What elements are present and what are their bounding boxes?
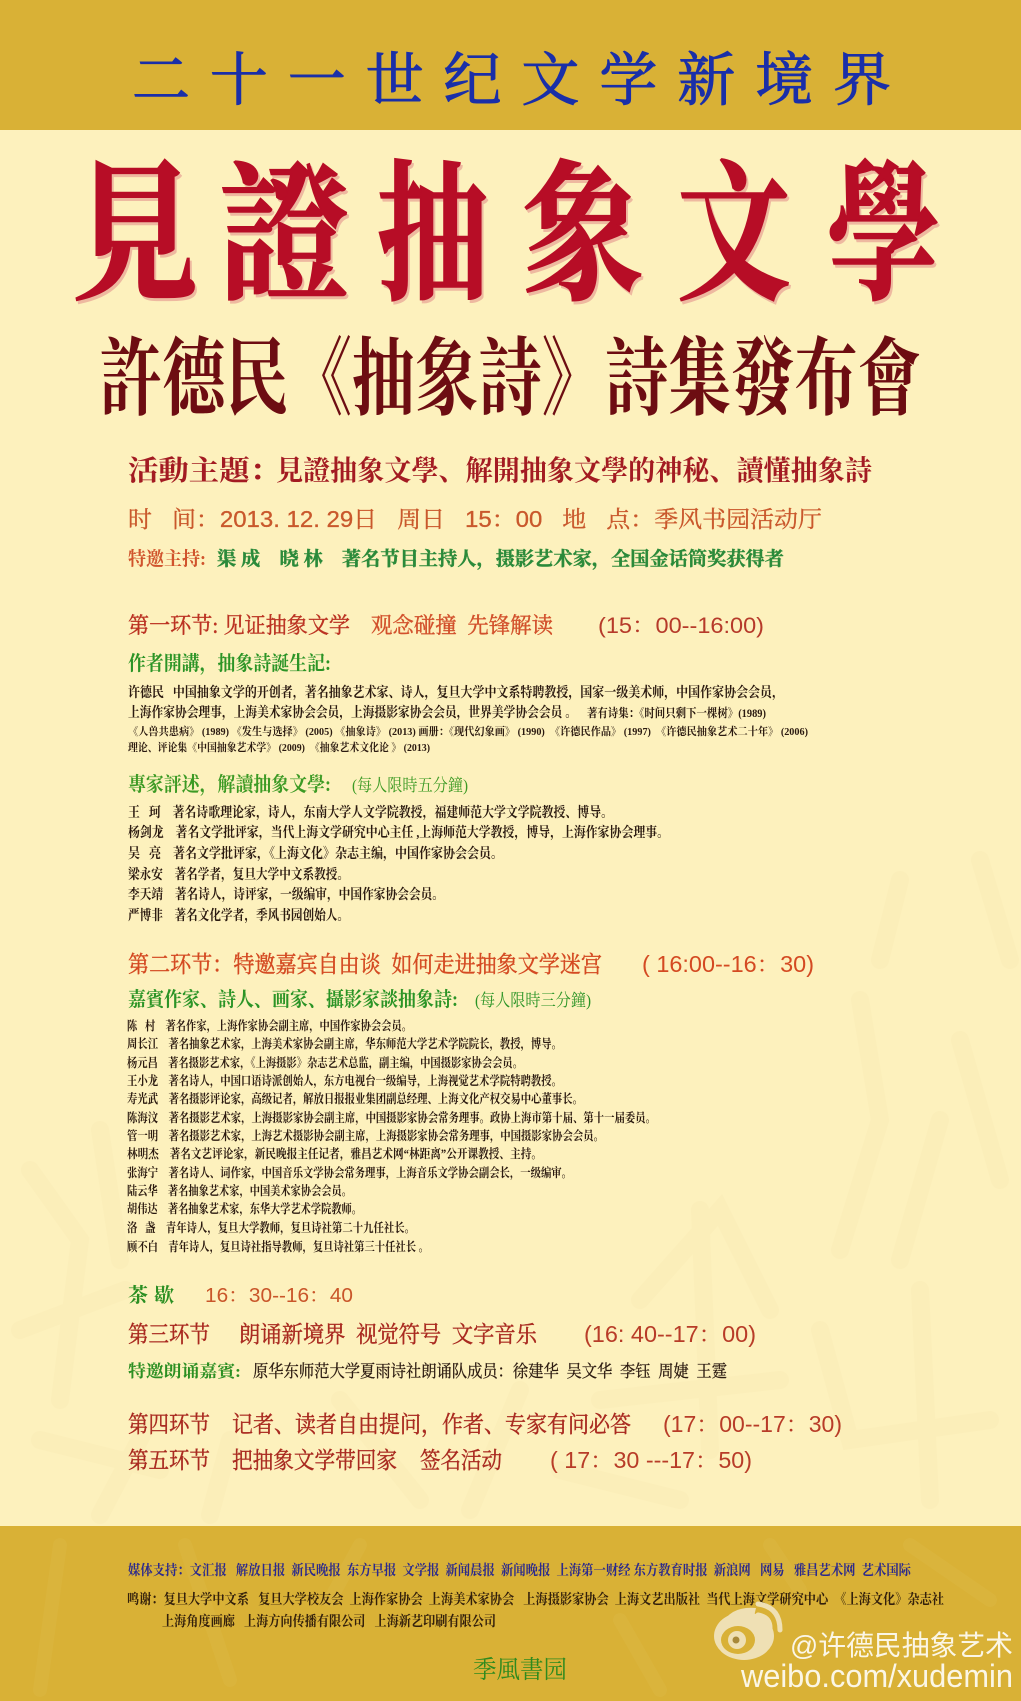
section 3 heading: 朗诵新境界 视觉符号 文字音乐 (239, 1322, 538, 1347)
section 3 heading (128, 1321, 756, 1347)
main title: 見證抽象文學: 文 (677, 152, 791, 320)
experts list: 吴 亮 著名文学批评家，《上海文化》杂志主编，中国作家协会会员。 (128, 845, 503, 862)
guests list: 寿光武 著名摄影评论家，高级记者，解放日报报业集团副总经理、上海文化产权交易中心董事长。 (127, 1091, 583, 1106)
main title: 見證抽象文學: 象 (522, 152, 644, 320)
main title: 見證抽象文學: 抽 (377, 152, 489, 320)
guests list: 陆云华 著名抽象艺术家，中国美术家协会会员。 (127, 1183, 352, 1198)
author biography: 著有诗集：《时间只剩下一棵树》(1989) (587, 705, 766, 720)
watermark: weibo handle: @许德民抽象艺术 (790, 1630, 1013, 1661)
author biography: 理论、评论集《中国抽象艺术学》 (2009) 《抽象艺术文化论 》 (2013) (128, 740, 430, 754)
guests list: 周长江 著名抽象艺术家，上海美术家协会副主席，华东师范大学艺术学院院长，教授，博导。 (127, 1036, 562, 1051)
section 5 heading: 签名活动 (420, 1448, 502, 1473)
main title: 見證抽象文學: 學 (828, 155, 942, 323)
guests list: 林明杰 著名文艺评论家，新民晚报主任记者，雅昌艺术网“林距离”公开课教授、主持。 (127, 1146, 542, 1161)
top band (0, 0, 1021, 130)
section 5 heading: ( 17：30 ---17：50) (550, 1447, 752, 1473)
section 5 heading: 第五环节 (128, 1448, 210, 1473)
main title: 見證抽象文學: 證 (219, 152, 350, 320)
guests list: 杨元昌 著名摄影艺术家，《上海摄影》杂志艺术总监，副主编，中国摄影家协会会员。 (127, 1055, 523, 1070)
section 1 heading: 观念碰撞 先锋解读 (371, 613, 553, 638)
time and place: 时 间：2013. 12. 29日 周日 15：00 地 点：季风书园活动厅 (128, 506, 822, 532)
section 1 heading: 第一环节: 见证抽象文学 (128, 613, 350, 638)
guests list: 管一明 著名摄影艺术家，上海艺术摄影协会副主席，上海摄影家协会常务理事，中国摄影家协会会员。 (127, 1128, 604, 1143)
section 1 heading (128, 613, 764, 638)
reciters line (128, 1361, 727, 1381)
section 2 heading: 第二环节：特邀嘉宾自由谈 如何走进抽象文学迷宫 (128, 952, 602, 977)
main title: 見證抽象文學: 象 (524, 155, 646, 323)
host line: 渠 成 晓 林 著名节目主持人，摄影艺术家，全国金话筒奖获得者 (217, 547, 784, 570)
experts list: 李天靖 著名诗人，诗评家，一级编审，中国作家协会会员。 (128, 886, 444, 903)
section 3 heading: (16: 40--17：00) (584, 1321, 756, 1347)
theme line: 見證抽象文學、解開抽象文學的神秘、讀懂抽象詩 (276, 455, 872, 487)
main title: 見證抽象文學: 文 (679, 155, 793, 323)
experts list (128, 804, 669, 924)
header: 二十一世纪文学新境界: 二十一世纪文学新境界 (132, 48, 891, 113)
guests list: 胡伟达 著名抽象艺术家，东华大学艺术学院教师。 (127, 1201, 362, 1216)
guests list: 张海宁 著名诗人、词作家，中国音乐文学协会常务理事，上海音乐文学协会副会长，一级编审。 (127, 1165, 572, 1180)
guests list (127, 1018, 656, 1254)
experts heading: 專家評述，解讀抽象文學: (128, 772, 331, 796)
main title: 見證抽象文學: 見 (72, 152, 198, 320)
main title: 見證抽象文學: 學 (826, 152, 940, 320)
guests heading: 嘉賓作家、詩人、画家、攝影家談抽象詩: (128, 987, 458, 1011)
media support: 媒体支持：文汇报 解放日报 新民晚报 东方早报 文学报 新闻晨报 新闻晚报 上海第一财经 东方教育时报 新浪网 网易 雅昌艺术网 艺术国际 (128, 1562, 912, 1579)
tea break: 16：30--16：40 (205, 1285, 353, 1307)
section 4 heading: (17：00--17：30) (663, 1411, 842, 1437)
section 5 heading: 把抽象文学带回家 (232, 1448, 397, 1473)
author talk heading: 作者開講，抽象詩誕生記: (128, 652, 331, 675)
tea break: 茶 歇 (128, 1283, 174, 1307)
experts list: 杨剑龙 著名文学批评家，当代上海文学研究中心主任 ,上海师范大学教授，博导，上海作家协会理事。 (128, 824, 669, 841)
experts list: 王 珂 著名诗歌理论家，诗人，东南大学人文学院教授，福建师范大学文学院教授、博导。 (128, 804, 613, 821)
main title: 見證抽象文學 (72, 152, 942, 323)
guests list: 陈海汶 著名摄影艺术家，上海摄影家协会副主席，中国摄影家协会常务理事。政协上海市第十届、第十一届委员。 (127, 1110, 656, 1125)
author biography: 上海作家协会理事，上海美术家协会会员，上海摄影家协会会员，世界美学协会会员 。 (128, 704, 577, 721)
experts heading: (每人限時五分鐘) (352, 776, 468, 795)
acknowledgements: 上海角度画廊 上海方向传播有限公司 上海新艺印刷有限公司 (162, 1613, 496, 1630)
host line: 特邀主持: (128, 548, 206, 570)
bottom band (0, 1526, 1021, 1701)
section 1 heading: (15：00--16:00) (598, 613, 764, 638)
section 4 heading (128, 1411, 842, 1438)
guests heading: (每人限時三分鐘) (475, 991, 591, 1010)
guests list: 王小龙 著名诗人，中国口语诗派创始人，东方电视台一级编导，上海视觉艺术学院特聘教授。 (127, 1073, 562, 1088)
section 5 heading (128, 1447, 752, 1473)
section 4 heading: 第四环节 (128, 1412, 210, 1437)
section 4 heading: 记者、读者自由提问，作者、专家有问必答 (232, 1412, 631, 1438)
theme line: 活動主題： (128, 455, 280, 487)
tea break (128, 1283, 353, 1307)
experts heading (128, 772, 468, 796)
section 3 heading: 第三环节 (128, 1322, 210, 1347)
guests list: 顾不白 青年诗人，复旦诗社指导教师，复旦诗社第三十任社长 。 (127, 1239, 429, 1254)
guests list: 洛 盏 青年诗人，复旦大学教师，复旦诗社第二十九任社长。 (127, 1220, 415, 1235)
section 2 heading: ( 16:00--16：30) (642, 951, 814, 977)
acknowledgements (127, 1591, 944, 1630)
organiser: 季風書园: 季風書园 (473, 1656, 567, 1684)
reciters line: 特邀朗诵嘉賓: (128, 1361, 241, 1381)
author biography: 许德民 中国抽象文学的开创者，著名抽象艺术家、诗人，复旦大学中文系特聘教授，国家一级美术师，中国作家协会会员， (128, 684, 784, 701)
experts list: 严博非 著名文化学者，季风书园创始人。 (128, 907, 349, 924)
experts list: 梁永安 著名学者，复旦大学中文系教授。 (128, 866, 349, 883)
icon: weibo logo (714, 1604, 780, 1660)
main title: 見證抽象文學: 證 (221, 155, 352, 323)
author biography: 《人兽共患病》 (1989) 《发生与选择》 (2005) 《抽象诗》 (2013) 画册：《现代幻象画》 (1990) 《许德民作品》 (1997) 《许德民抽象艺术二十年》 (2006) (128, 724, 808, 738)
watermark: weibo url: weibo.com/xudemin (740, 1658, 1013, 1694)
main title: 見證抽象文學: 見 (74, 155, 200, 323)
reciters line: 原华东师范大学夏雨诗社朗诵队成员：徐建华 吴文华 李钰 周婕 王霆 (253, 1361, 727, 1381)
guests list: 陈 村 著名作家，上海作家协会副主席，中国作家协会会员。 (127, 1018, 412, 1033)
main title: 見證抽象文學: 抽 (379, 155, 491, 323)
author biography (128, 684, 808, 754)
